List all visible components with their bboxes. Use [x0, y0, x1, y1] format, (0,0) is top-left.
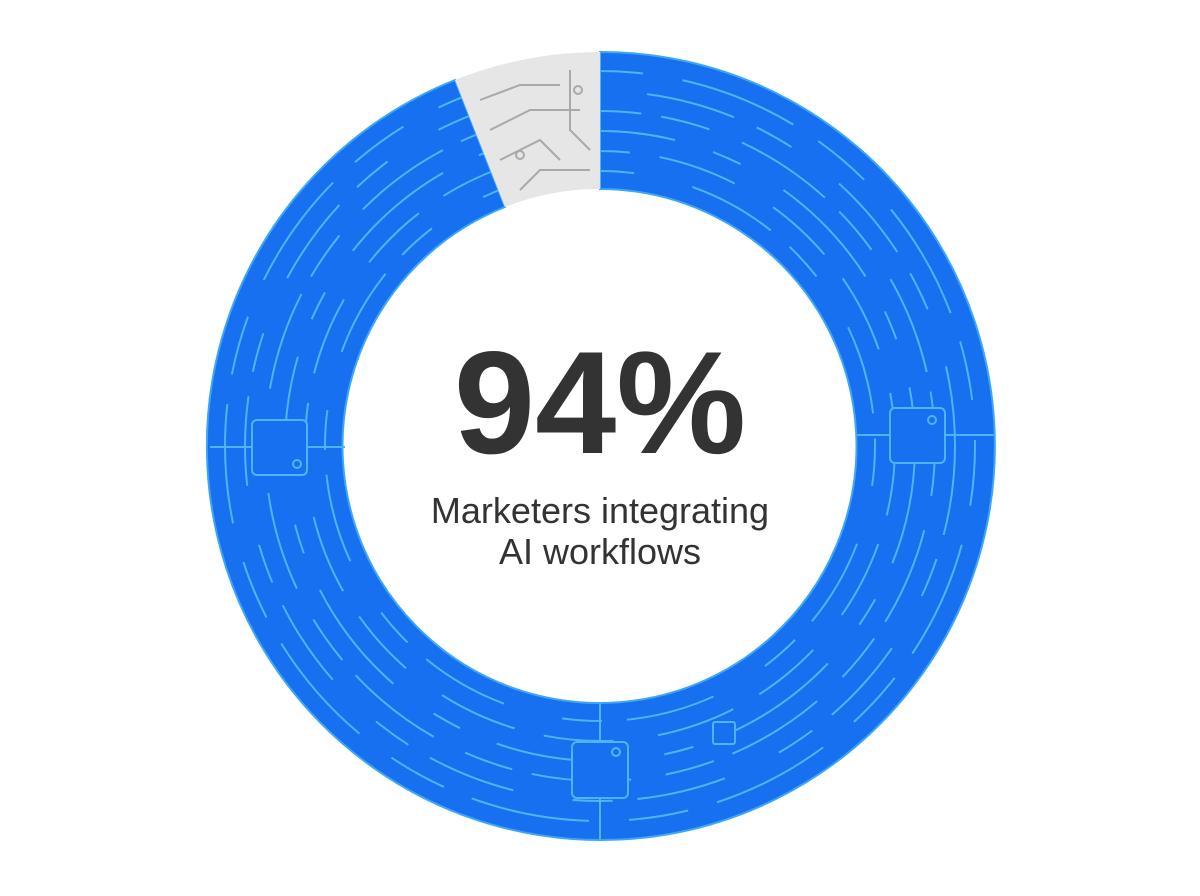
icon: left chip: [230, 420, 345, 475]
segment: gray 6%: [455, 52, 600, 207]
label text: AI workflows: [499, 531, 701, 572]
big number: 94%: [454, 321, 746, 484]
icon: right chip: [890, 408, 945, 463]
donut chart: [206, 51, 996, 841]
icon: bottom chip: [572, 722, 735, 798]
label text: Marketers integrating: [431, 490, 769, 531]
label text: [431, 490, 769, 572]
segment: blue 94%: [207, 52, 995, 850]
